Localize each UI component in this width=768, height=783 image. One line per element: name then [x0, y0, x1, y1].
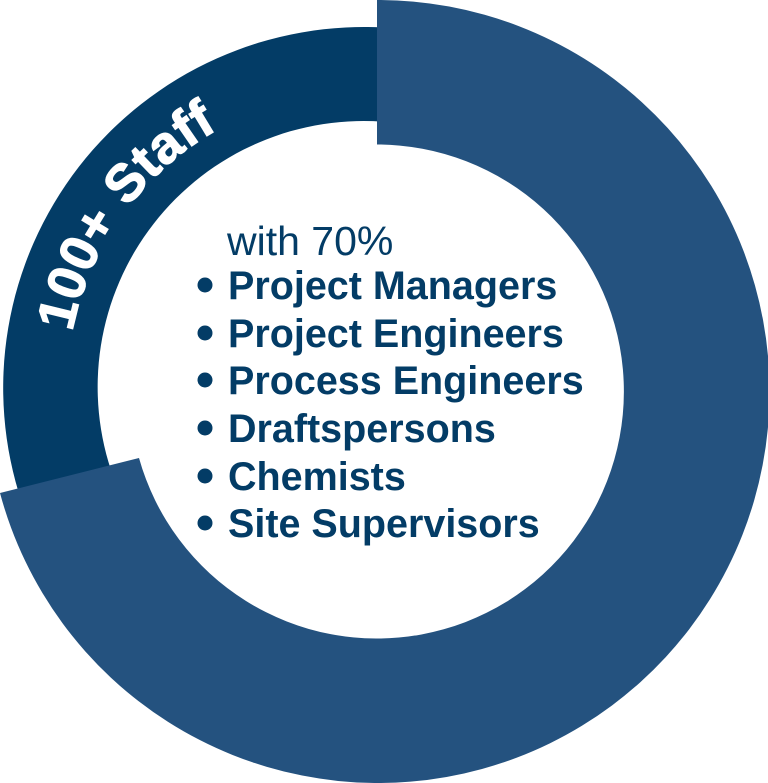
staff role list [198, 264, 584, 546]
list item: Project Engineers: Project Engineers [228, 312, 564, 356]
list item: Process Engineers: Process Engineers [228, 359, 584, 403]
ring label: 100+ Staff: 100+ Staff [38, 96, 214, 330]
list item: Draftspersons: Draftspersons [228, 407, 496, 451]
list item: Project Managers: Project Managers [228, 264, 557, 308]
intro text: with 70% [226, 218, 393, 264]
list item: Chemists: Chemists [228, 455, 406, 499]
dark ring segment: 100+ staff [3, 27, 390, 503]
list item: Site Supervisors: Site Supervisors [228, 502, 540, 546]
